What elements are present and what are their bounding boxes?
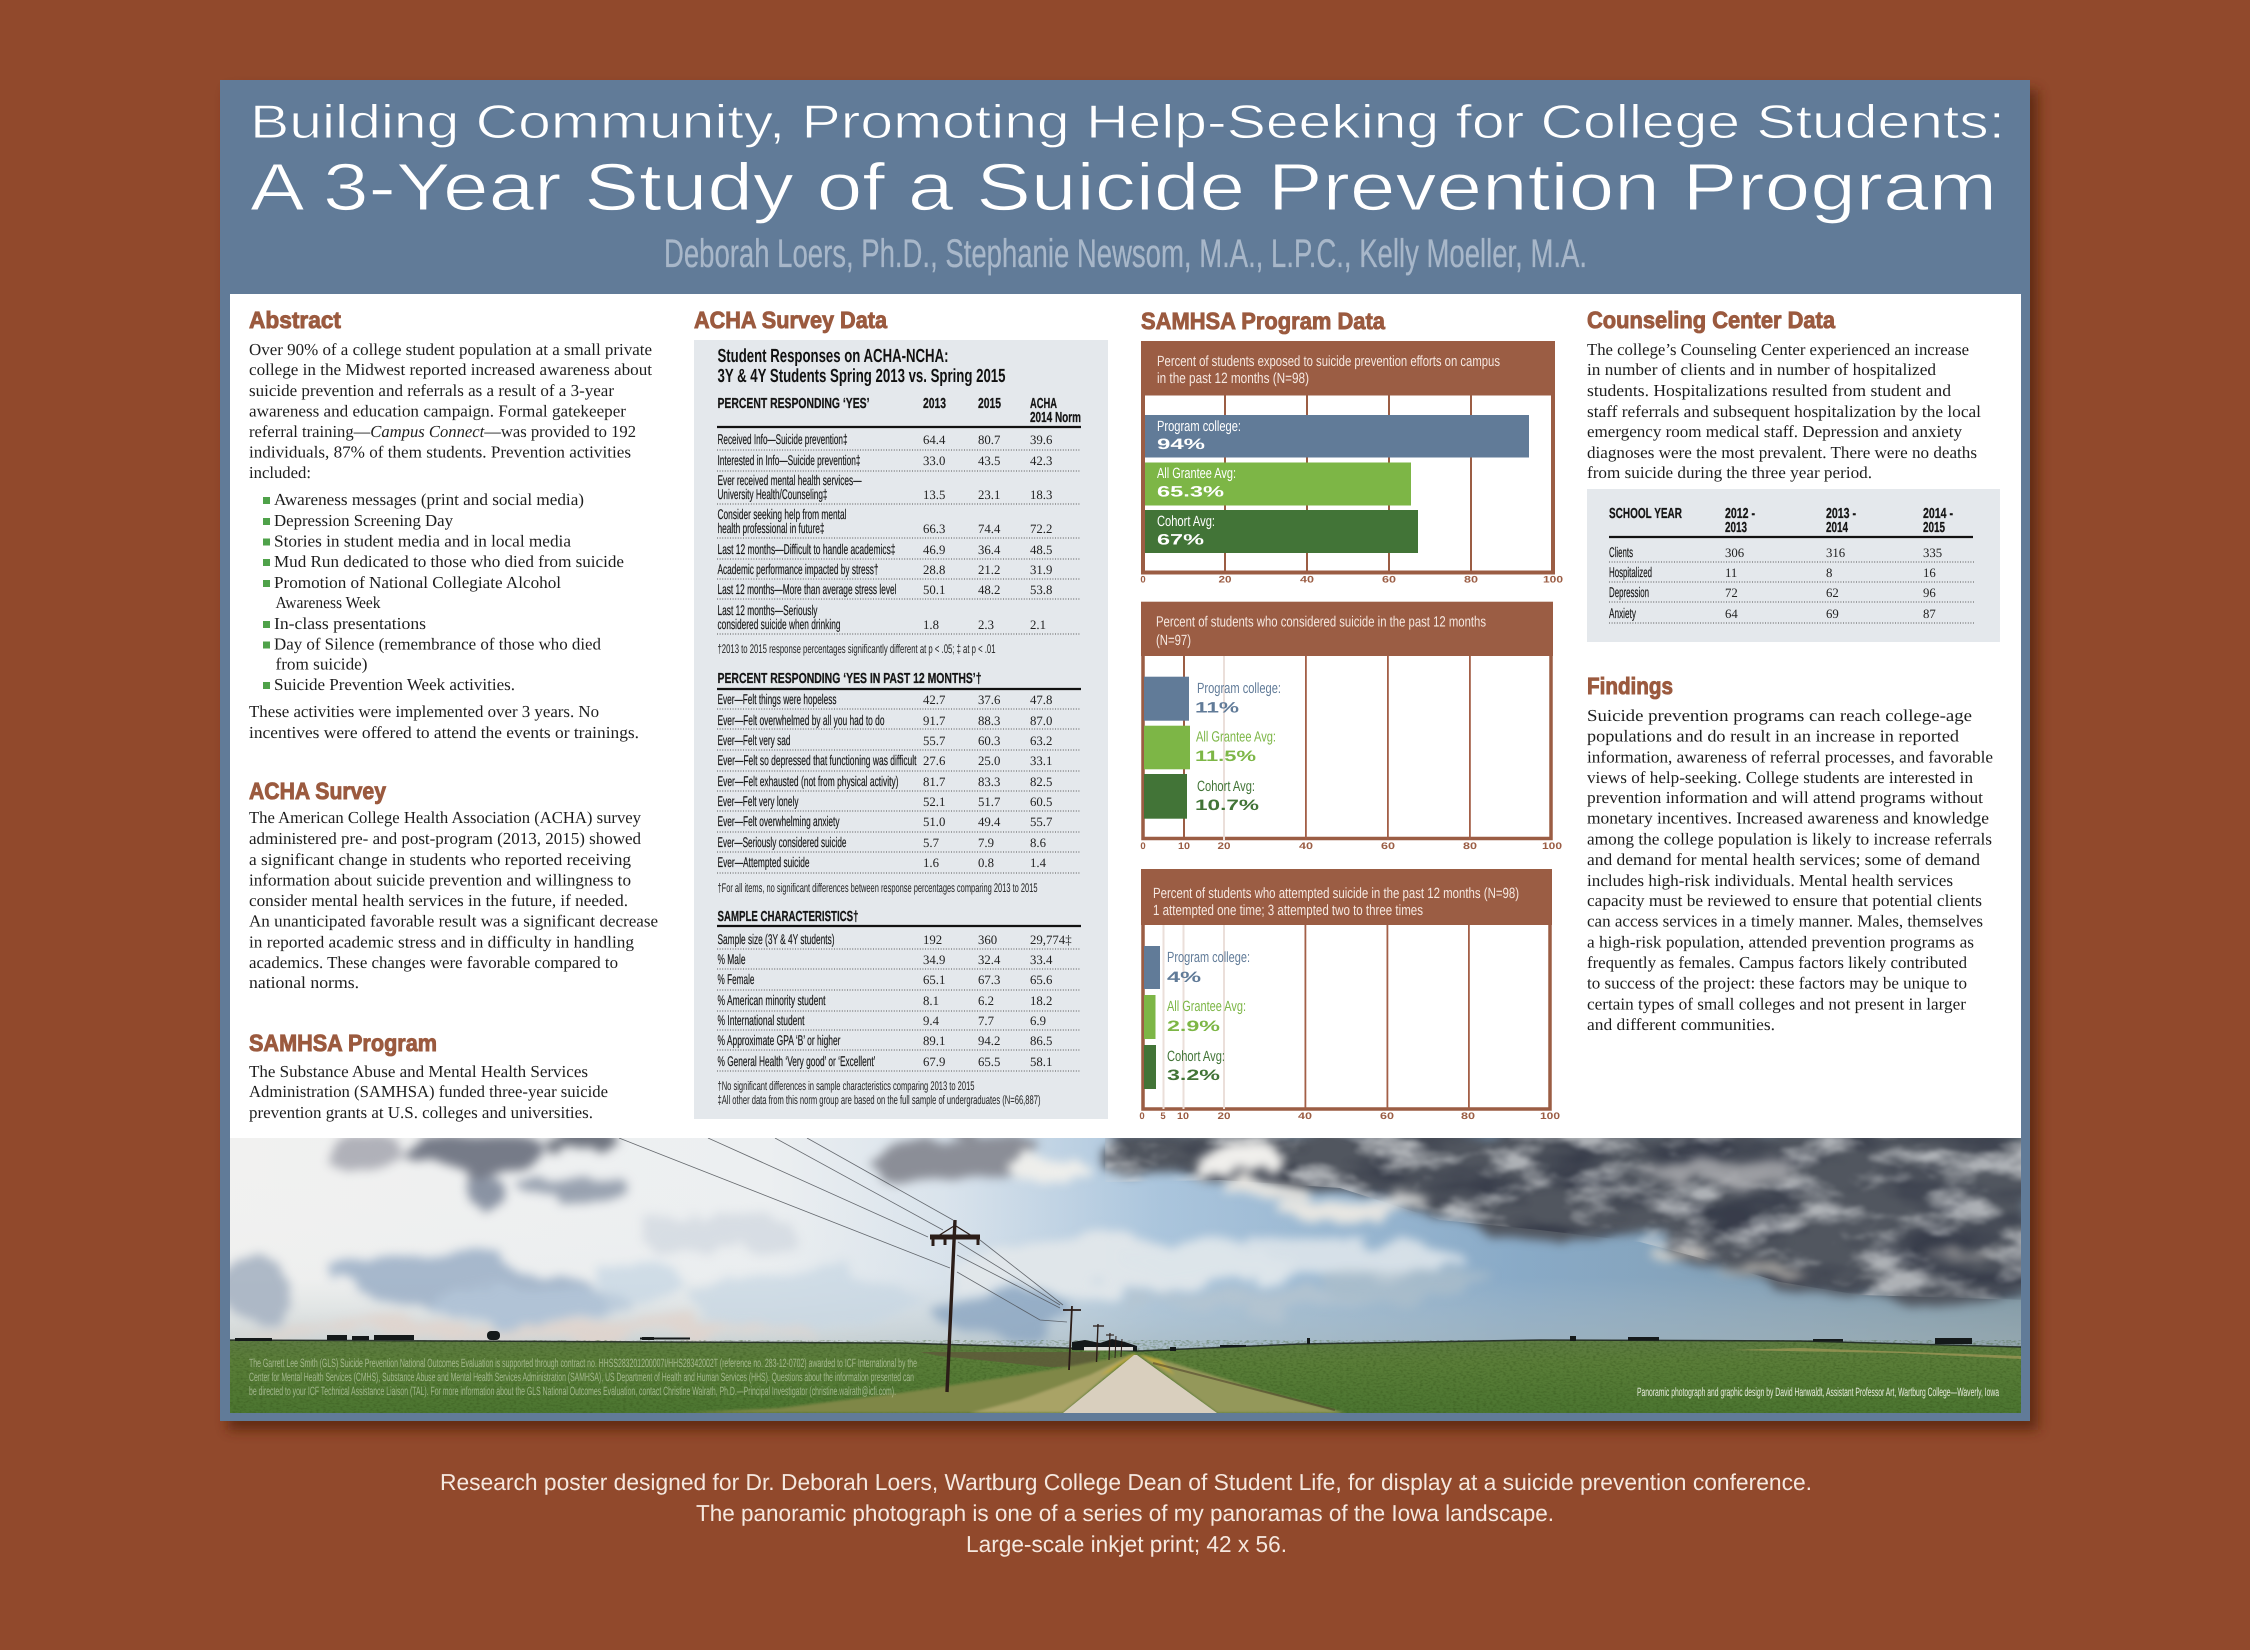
table section: sample characteristics: 58.1 — [1030, 1055, 1052, 1069]
ACHA survey paragraph: in reported academic stress and in difficulty in handling — [249, 932, 635, 952]
table section: percent responding yes: 33.0 — [923, 454, 945, 468]
bar: all grantee 11.5% — [1144, 726, 1276, 769]
table section: percent responding yes in past 12 months: PERCENT RESPONDING ‘YES IN PAST 12 MONTHS’† — [718, 671, 982, 687]
table section: percent responding yes: 42.3 — [1030, 454, 1052, 468]
table section: percent responding yes: 39.6 — [1030, 433, 1053, 447]
bar: all grantee 11.5%: 11.5% — [1195, 748, 1256, 765]
panel: SAMHSA program text — [249, 1030, 608, 1122]
table section: sample characteristics: 9.4 — [923, 1014, 940, 1028]
heading: counseling center data: Counseling Center Data — [1587, 307, 1836, 333]
abstract closing text: These activities were implemented over 3 years. No — [249, 702, 599, 721]
table section: sample characteristics: †No significant differences in sample characteristics comparing 2013 to 2015 — [718, 1079, 975, 1093]
table section: percent responding yes in past 12 months: Ever—Felt very lonely — [718, 793, 798, 809]
table: counseling center by school year: 2015 — [1923, 520, 1945, 536]
table section: percent responding yes in past 12 months: Ever—Attempted suicide — [718, 854, 810, 870]
caption below poster: Large-scale inkjet print; 42 x 56. — [966, 1531, 1287, 1557]
table section: sample characteristics: % International student — [718, 1012, 805, 1028]
table section: percent responding yes: Academic performance impacted by stress† — [718, 561, 878, 577]
bar chart: exposed to prevention efforts: Percent of students exposed to suicide prevention efforts on campus — [1157, 354, 1500, 370]
table section: percent responding yes: 50.1 — [923, 583, 945, 597]
table section: sample characteristics: 67.3 — [978, 973, 1000, 987]
abstract text: college in the Midwest reported increased awareness about — [249, 360, 652, 379]
table section: percent responding yes: Interested in Info—Suicide prevention‡ — [718, 452, 860, 468]
table section: percent responding yes in past 12 months: Ever—Seriously considered suicide — [718, 834, 847, 850]
axis labels: 100 — [1542, 841, 1562, 852]
counseling center paragraph: from suicide during the three year period. — [1587, 463, 1872, 482]
axis labels: 20 — [1218, 841, 1230, 852]
table section: percent responding yes: 72.2 — [1030, 522, 1052, 536]
table: counseling center by school year: 72 — [1725, 586, 1738, 600]
table section: percent responding yes: Last 12 months—Seriously — [718, 602, 818, 618]
bar: program college 11% — [1144, 677, 1281, 721]
bullet list: prevention activities: Depression Screening Day — [274, 511, 454, 530]
table: counseling center by school year: Anxiety — [1609, 605, 1636, 621]
axis labels: 80 — [1461, 1111, 1475, 1122]
table section: percent responding yes: University Health/Counseling‡ — [718, 486, 828, 502]
counseling center paragraph: students. Hospitalizations resulted from student and — [1587, 381, 1952, 400]
table section: percent responding yes in past 12 months: 83.3 — [978, 775, 1000, 789]
findings paragraph: capacity must be reviewed to ensure that potential clients — [1587, 891, 1982, 910]
table section: sample characteristics: 8.1 — [923, 994, 939, 1008]
findings paragraph: frequently as females. Campus factors likely contributed — [1587, 953, 1968, 972]
bar: cohort 10.7%: 10.7% — [1195, 797, 1259, 814]
photo credit: evaluation note — [249, 1356, 917, 1398]
bullet list: prevention activities: Stories in student media and in local media — [274, 532, 572, 550]
findings paragraph: to success of the project: these factors may be unique to — [1587, 974, 1967, 992]
poster panel — [213, 80, 2038, 1430]
table section: percent responding yes: 53.8 — [1030, 583, 1052, 597]
table section: percent responding yes in past 12 months: 87.0 — [1030, 714, 1052, 728]
table section: percent responding yes in past 12 months: Ever—Felt overwhelming anxiety — [718, 813, 840, 829]
table section: percent responding yes in past 12 months: 91.7 — [923, 714, 946, 728]
bar chart: considered suicide: (N=97) — [1156, 633, 1191, 649]
bar: cohort 67% — [1145, 510, 1418, 553]
axis labels: 10 — [1177, 1111, 1189, 1122]
table section: percent responding yes: Consider seeking help from mental — [718, 506, 846, 522]
table section: percent responding yes: 23.1 — [978, 488, 1000, 502]
abstract text: suicide prevention and referrals as a result of a 3-year — [249, 381, 614, 400]
table section: percent responding yes: ACHA — [1030, 396, 1057, 412]
counseling center paragraph: diagnoses were the most prevalent. There were no deaths — [1587, 443, 1977, 462]
title: Building Community, Promoting Help-Seeking for College Students: — [250, 96, 2005, 149]
table section: sample characteristics: % General Health ‘Very good’ or ‘Excellent’ — [718, 1053, 876, 1069]
SAMHSA program paragraph: Administration (SAMHSA) funded three-year suicide — [249, 1082, 608, 1101]
table section: sample characteristics: 65.1 — [923, 973, 945, 987]
findings paragraph: information, awareness of referral processes, and favorable — [1587, 748, 1993, 766]
table: counseling center by school year: 87 — [1923, 607, 1936, 621]
abstract closing text: incentives were offered to attend the events or trainings. — [249, 723, 639, 742]
abstract text: Over 90% of a college student population at a small private — [249, 340, 652, 359]
bullet list: prevention activities: In-class presentations — [274, 614, 426, 633]
panel: counseling center data — [1587, 307, 2000, 642]
table: counseling center by school year: 2014 — [1826, 520, 1848, 536]
table section: percent responding yes in past 12 months: 7.9 — [978, 836, 994, 850]
table title: 3Y & 4Y Students Spring 2013 vs. Spring 2015 — [718, 366, 1006, 387]
bar: cohort 10.7% — [1144, 774, 1259, 819]
bar: cohort 67%: 67% — [1157, 531, 1204, 548]
table section: sample characteristics: 33.4 — [1030, 953, 1053, 967]
axis labels: 80 — [1464, 574, 1478, 586]
axis labels: 20 — [1218, 574, 1232, 586]
bullet list: prevention activities: Day of Silence (remembrance of those who died — [274, 634, 602, 654]
table section: percent responding yes in past 12 months: 5.7 — [923, 836, 940, 850]
heading: findings: Findings — [1587, 673, 1673, 699]
bar: cohort 3.2%: 3.2% — [1167, 1067, 1220, 1084]
ACHA survey paragraph: a significant change in students who reported receiving — [249, 850, 632, 869]
table section: sample characteristics — [717, 909, 1081, 1107]
road and grass verges — [680, 1354, 1345, 1413]
table: counseling center by school year: Clients — [1609, 544, 1633, 560]
ACHA survey paragraph: An unanticipated favorable result was a significant decrease — [249, 912, 658, 930]
bullet list: prevention activities: Mud Run dedicated to those who died from suicide — [274, 552, 624, 571]
ACHA survey paragraph: information about suicide prevention and willingness to — [249, 870, 631, 890]
table section: percent responding yes: 64.4 — [923, 433, 946, 447]
table section: sample characteristics: % Approximate GPA ‘B’ or higher — [718, 1032, 841, 1048]
bar: program college 4%: 4% — [1167, 969, 1201, 986]
SAMHSA program paragraph: prevention grants at U.S. colleges and universities. — [249, 1103, 593, 1122]
bar: all grantee 65.3%: 65.3% — [1157, 483, 1224, 500]
table section: percent responding yes in past 12 months: Ever—Felt so depressed that functioning was difficult — [718, 752, 917, 768]
findings paragraph: Suicide prevention programs can reach college-age — [1587, 706, 1972, 725]
bullet list: prevention activities: Awareness Week — [276, 593, 381, 612]
horizon tree lines — [230, 1331, 2021, 1351]
table: counseling center by school year: 11 — [1725, 566, 1737, 580]
table: counseling center by school year: 8 — [1826, 566, 1832, 580]
counseling center paragraph: in number of clients and in number of hospitalized — [1587, 360, 1937, 379]
bar: cohort 3.2% — [1144, 1045, 1225, 1089]
table: counseling center by school year: 62 — [1826, 586, 1839, 600]
table: counseling center by school year: 335 — [1923, 546, 1942, 560]
table section: sample characteristics: % Male — [718, 951, 746, 967]
table section: percent responding yes: 2014 Norm — [1030, 410, 1081, 426]
table section: sample characteristics: 86.5 — [1030, 1034, 1052, 1048]
table section: percent responding yes: Last 12 months—More than average stress level — [718, 581, 896, 597]
bullet list: prevention activities: Promotion of National Collegiate Alcohol — [274, 573, 561, 592]
table section: percent responding yes in past 12 months: 27.6 — [923, 754, 946, 768]
findings paragraph: certain types of small colleges and not present in larger — [1587, 994, 1966, 1014]
axis labels: 40 — [1298, 1111, 1312, 1122]
table section: percent responding yes: 2015 — [978, 396, 1001, 412]
table section: percent responding yes: 48.5 — [1030, 543, 1052, 557]
table section: percent responding yes: 2.1 — [1030, 618, 1046, 632]
bar: all grantee 2.9%: All Grantee Avg: — [1167, 999, 1246, 1015]
table section: percent responding yes in past 12 months: 60.3 — [978, 734, 1000, 748]
panel: ACHA survey data — [694, 307, 1108, 1119]
table section: percent responding yes: 13.5 — [923, 488, 945, 502]
bar chart: exposed to prevention efforts: in the past 12 months (N=98) — [1157, 371, 1309, 387]
table title — [718, 346, 1006, 387]
bar chart: considered suicide: Percent of students who considered suicide in the past 12 months — [1156, 615, 1486, 631]
bar: program college 4%: Program college: — [1167, 950, 1250, 966]
table section: percent responding yes: 74.4 — [978, 522, 1001, 536]
heading: SAMHSA program data: SAMHSA Program Data — [1141, 308, 1386, 334]
table section: sample characteristics: 360 — [978, 933, 997, 947]
table: counseling center by school year — [1587, 489, 2000, 642]
panel: abstract — [249, 307, 652, 742]
title — [250, 96, 2005, 225]
table section: sample characteristics: SAMPLE CHARACTERISTICS† — [718, 909, 858, 925]
table section: percent responding yes in past 12 months — [717, 671, 1081, 895]
bar: all grantee 65.3%: All Grantee Avg: — [1157, 466, 1236, 482]
bar: all grantee 65.3% — [1145, 462, 1411, 506]
title: A 3-Year Study of a Suicide Prevention Program — [250, 150, 1997, 225]
table section: percent responding yes in past 12 months: 25.0 — [978, 754, 1000, 768]
findings paragraph: among the college population is likely to increase referrals — [1587, 830, 1992, 848]
panel: SAMHSA program data — [1139, 308, 1563, 1122]
table section: percent responding yes in past 12 months: Ever—Felt very sad — [718, 732, 790, 748]
table: counseling center by school year: 96 — [1923, 586, 1936, 600]
table section: percent responding yes in past 12 months: 51.7 — [978, 795, 1001, 809]
table section: percent responding yes in past 12 months: 55.7 — [1030, 815, 1053, 829]
ACHA survey paragraph: consider mental health services in the future, if needed. — [249, 891, 628, 910]
axis labels: 40 — [1299, 841, 1313, 852]
findings paragraph — [1587, 706, 1993, 1034]
heading: ACHA survey: ACHA Survey — [249, 778, 386, 804]
table: counseling center by school year: 64 — [1725, 607, 1738, 621]
table section: sample characteristics: 192 — [923, 933, 942, 947]
axis labels — [1140, 841, 1562, 852]
table section: percent responding yes in past 12 months: Ever—Felt things were hopeless — [718, 691, 836, 707]
table section: sample characteristics: 32.4 — [978, 953, 1001, 967]
axis labels: 60 — [1380, 1111, 1394, 1122]
axis labels: 100 — [1540, 1111, 1560, 1122]
table section: percent responding yes: 66.3 — [923, 522, 945, 536]
bar: program college 4% — [1144, 946, 1250, 989]
counseling center paragraph: staff referrals and subsequent hospitalization by the local — [1587, 402, 1981, 421]
panoramic photograph: storm over Iowa road — [213, 1130, 2030, 1413]
bar: cohort 3.2%: Cohort Avg: — [1167, 1049, 1225, 1065]
bar: program college 94%: 94% — [1157, 436, 1205, 453]
findings paragraph: includes high-risk individuals. Mental health services — [1587, 871, 1953, 890]
table section: percent responding yes in past 12 months: 42.7 — [923, 693, 946, 707]
bullet list: prevention activities: Awareness messages (print and social media) — [274, 490, 584, 509]
table section: percent responding yes in past 12 months: 37.6 — [978, 693, 1001, 707]
bar: all grantee 2.9%: 2.9% — [1167, 1018, 1220, 1035]
findings paragraph: monetary incentives. Increased awareness and knowledge — [1587, 808, 1989, 828]
panel: ACHA survey text — [249, 778, 658, 992]
abstract text: referral training—Campus Connect—was provided to 192 — [249, 422, 636, 441]
table section: percent responding yes in past 12 months: 8.6 — [1030, 836, 1047, 850]
bar: program college 94% — [1145, 415, 1529, 458]
heading: ACHA survey data: ACHA Survey Data — [694, 307, 888, 333]
table section: percent responding yes in past 12 months: 49.4 — [978, 815, 1001, 829]
table section: sample characteristics: 67.9 — [923, 1055, 945, 1069]
abstract text: individuals, 87% of them students. Prevention activities — [249, 442, 631, 462]
axis labels: 60 — [1381, 841, 1395, 852]
table: counseling center by school year: 306 — [1725, 546, 1745, 560]
table: student responses — [694, 340, 1108, 1119]
table section: percent responding yes: 1.8 — [923, 618, 939, 632]
table section: sample characteristics: 6.9 — [1030, 1014, 1046, 1028]
table section: percent responding yes: 2013 — [923, 396, 946, 412]
bar chart: attempted suicide — [1139, 869, 1560, 1122]
axis labels: 80 — [1463, 841, 1477, 852]
findings paragraph: and different communities. — [1587, 1015, 1775, 1034]
ACHA survey paragraph — [249, 808, 658, 992]
axis labels: 100 — [1543, 574, 1563, 586]
heading: abstract: Abstract — [249, 307, 341, 333]
axis labels: 60 — [1382, 574, 1396, 586]
ACHA survey paragraph: administered pre- and post-program (2013, 2015) showed — [249, 829, 642, 848]
table section: percent responding yes in past 12 months: 1.4 — [1030, 856, 1047, 870]
table section: sample characteristics: 89.1 — [923, 1034, 945, 1048]
bullet list: prevention activities — [263, 490, 624, 694]
table section: percent responding yes: 18.3 — [1030, 488, 1052, 502]
table section: percent responding yes: 2.3 — [978, 618, 994, 632]
table: counseling center by school year: SCHOOL YEAR — [1609, 506, 1682, 522]
bar chart: attempted suicide: 1 attempted one time; 3 attempted two to three times — [1153, 903, 1423, 919]
table section: percent responding yes in past 12 months: †For all items, no significant differences between response percentages comparing 2013 to 2015 — [718, 881, 1038, 895]
abstract closing text — [249, 702, 639, 742]
ACHA survey paragraph: The American College Health Association (ACHA) survey — [249, 808, 642, 827]
table section: sample characteristics: 94.2 — [978, 1034, 1000, 1048]
table title: Student Responses on ACHA-NCHA: — [718, 346, 948, 367]
table section: percent responding yes: 80.7 — [978, 433, 1001, 447]
table section: sample characteristics: 18.2 — [1030, 994, 1052, 1008]
axis labels — [1140, 574, 1563, 586]
abstract text: awareness and education campaign. Formal gatekeeper — [249, 402, 626, 420]
table section: sample characteristics: 6.2 — [978, 994, 994, 1008]
table: counseling center by school year: 2013 - — [1826, 506, 1856, 522]
table section: percent responding yes in past 12 months: Ever—Felt overwhelmed by all you had to do — [718, 712, 885, 728]
table: counseling center by school year: Hospitalized — [1609, 564, 1652, 580]
photo credit: evaluation note: Center for Mental Health Services (CMHS), Substance Abuse and Mental Health Services Administration (SAMHSA), US Department of Health and Human Services (HHS). Questions about the information presented can — [249, 1370, 914, 1384]
table section: sample characteristics: % American minority student — [718, 992, 826, 1008]
bar: all grantee 2.9% — [1144, 995, 1246, 1039]
axis labels: 20 — [1218, 1111, 1230, 1122]
table section: percent responding yes in past 12 months: 55.7 — [923, 734, 946, 748]
bar: program college 94%: Program college: — [1157, 419, 1241, 435]
axis labels: 40 — [1300, 574, 1314, 586]
bar chart: considered suicide — [1140, 602, 1562, 852]
table section: percent responding yes in past 12 months: 81.7 — [923, 775, 946, 789]
counseling center paragraph — [1587, 340, 1981, 482]
table section: sample characteristics: 65.6 — [1030, 973, 1053, 987]
table section: percent responding yes: 36.4 — [978, 543, 1001, 557]
counseling center paragraph: The college’s Counseling Center experienced an increase — [1587, 340, 1969, 359]
bullet list: prevention activities: Suicide Prevention Week activities. — [274, 675, 515, 694]
panel: findings — [1587, 673, 1993, 1034]
table section: percent responding yes in past 12 months: 51.0 — [923, 815, 945, 829]
axis labels — [1139, 1111, 1560, 1122]
table section: percent responding yes in past 12 months: 52.1 — [923, 795, 945, 809]
table section: sample characteristics: 34.9 — [923, 953, 945, 967]
table section: sample characteristics: % Female — [718, 971, 755, 987]
table section: percent responding yes in past 12 months: 63.2 — [1030, 734, 1052, 748]
table section: percent responding yes in past 12 months: 0.8 — [978, 856, 994, 870]
table section: percent responding yes in past 12 months: 47.8 — [1030, 693, 1052, 707]
bar chart: exposed to prevention efforts — [1140, 341, 1563, 586]
abstract text — [249, 340, 652, 482]
axis labels: 0 — [1140, 574, 1146, 586]
table section: sample characteristics: 65.5 — [978, 1055, 1000, 1069]
bullet list: prevention activities: from suicide) — [276, 654, 368, 674]
table section: percent responding yes: Ever received mental health services— — [718, 472, 862, 488]
table: counseling center by school year: 16 — [1923, 566, 1936, 580]
table section: percent responding yes: Received Info—Suicide prevention‡ — [718, 431, 848, 447]
abstract text: included: — [249, 463, 311, 482]
table section: sample characteristics: 29,774‡ — [1030, 933, 1072, 947]
counseling center paragraph: emergency room medical staff. Depression and anxiety — [1587, 422, 1963, 441]
table section: percent responding yes in past 12 months: Ever—Felt exhausted (not from physical activity) — [718, 773, 898, 789]
heading: SAMHSA program: SAMHSA Program — [249, 1030, 437, 1056]
axis labels: 0 — [1139, 1111, 1145, 1122]
table section: percent responding yes: 28.8 — [923, 563, 945, 577]
findings paragraph: populations and do result in an increase in reported — [1587, 726, 1960, 746]
ACHA survey paragraph: academics. These changes were favorable compared to — [249, 953, 618, 972]
table section: percent responding yes: Last 12 months—Difficult to handle academics‡ — [718, 541, 896, 557]
utility poles and wires — [619, 1138, 1122, 1392]
table: counseling center by school year: 316 — [1826, 546, 1846, 560]
bar: cohort 67%: Cohort Avg: — [1157, 514, 1215, 530]
axis labels: 0 — [1140, 841, 1146, 852]
table section: percent responding yes: 46.9 — [923, 543, 945, 557]
bar: cohort 10.7%: Cohort Avg: — [1197, 779, 1255, 795]
SAMHSA program paragraph — [249, 1062, 608, 1122]
table section: percent responding yes in past 12 months: 60.5 — [1030, 795, 1052, 809]
table section: percent responding yes: health professional in future‡ — [718, 520, 824, 536]
caption below poster: The panoramic photograph is one of a series of my panoramas of the Iowa landscape. — [696, 1500, 1554, 1526]
white content panel — [230, 294, 2021, 1139]
photo credit: evaluation note: The Garrett Lee Smith (GLS) Suicide Prevention National Outcomes Evaluation is supported through contract no. HHSS283201200007I/HHS28342002T (reference no. 283-12-0702) awarded to ICF International by the — [249, 1356, 917, 1370]
table section: percent responding yes in past 12 months: 82.5 — [1030, 775, 1052, 789]
table: counseling center by school year: 69 — [1826, 607, 1839, 621]
table section: percent responding yes in past 12 months: 88.3 — [978, 714, 1000, 728]
table: counseling center by school year: 2012 - — [1725, 506, 1755, 522]
findings paragraph: can access services in a timely manner. Males, themselves — [1587, 912, 1983, 930]
table section: percent responding yes: 48.2 — [978, 583, 1000, 597]
caption below poster: Research poster designed for Dr. Deborah Loers, Wartburg College Dean of Student Life, for display at a suicide prevention conference. — [440, 1469, 1812, 1495]
authors: Deborah Loers, Ph.D., Stephanie Newsom, M.A., L.P.C., Kelly Moeller, M.A. — [664, 232, 1587, 276]
table section: sample characteristics: 7.7 — [978, 1014, 995, 1028]
table section: sample characteristics: Sample size (3Y & 4Y students) — [718, 931, 834, 947]
table: counseling center by school year: Depression — [1609, 584, 1649, 600]
ACHA survey paragraph: national norms. — [249, 973, 359, 992]
axis labels: 10 — [1178, 841, 1190, 852]
table section: percent responding yes in past 12 months: 1.6 — [923, 856, 940, 870]
table section: percent responding yes: considered suicide when drinking — [718, 616, 840, 632]
table section: percent responding yes — [717, 396, 1081, 656]
field — [230, 1340, 2021, 1413]
table: counseling center by school year: 2013 — [1725, 520, 1747, 536]
table: counseling center by school year: 2014 - — [1923, 506, 1953, 522]
table section: percent responding yes: 21.2 — [978, 563, 1000, 577]
table section: percent responding yes in past 12 months: 33.1 — [1030, 754, 1052, 768]
bar chart: attempted suicide: Percent of students who attempted suicide in the past 12 months (N=98) — [1153, 886, 1519, 902]
bar: all grantee 11.5%: All Grantee Avg: — [1196, 730, 1276, 746]
table section: percent responding yes: 31.9 — [1030, 563, 1052, 577]
table section: percent responding yes: †2013 to 2015 response percentages significantly different at p < .05; ‡ at p < .01 — [718, 642, 996, 656]
caption below poster — [440, 1469, 1812, 1557]
table section: sample characteristics: ‡All other data from this norm group are based on the full sample of undergraduates (N=66,887) — [718, 1093, 1040, 1107]
findings paragraph: a high-risk population, attended prevention programs as — [1587, 932, 1974, 952]
axis labels: 5 — [1160, 1111, 1166, 1122]
bar: program college 11%: 11% — [1195, 700, 1239, 717]
findings paragraph: prevention information and will attend programs without — [1587, 788, 1983, 807]
table section: percent responding yes: PERCENT RESPONDING ‘YES’ — [718, 396, 870, 412]
findings paragraph: views of help-seeking. College students are interested in — [1587, 768, 1974, 787]
bar: program college 11%: Program college: — [1197, 681, 1281, 697]
photo credit: evaluation note: be directed to your ICF Technical Assistance Liaison (TAL). For more information about the GLS National Outcomes Evaluation, contact Christine Walrath, Ph.D.—Principal Investigator (christine.walrath@icfi.com). — [249, 1384, 896, 1398]
table section: percent responding yes: 43.5 — [978, 454, 1000, 468]
SAMHSA program paragraph: The Substance Abuse and Mental Health Services — [249, 1062, 588, 1081]
findings paragraph: and demand for mental health services; some of demand — [1587, 850, 1981, 869]
